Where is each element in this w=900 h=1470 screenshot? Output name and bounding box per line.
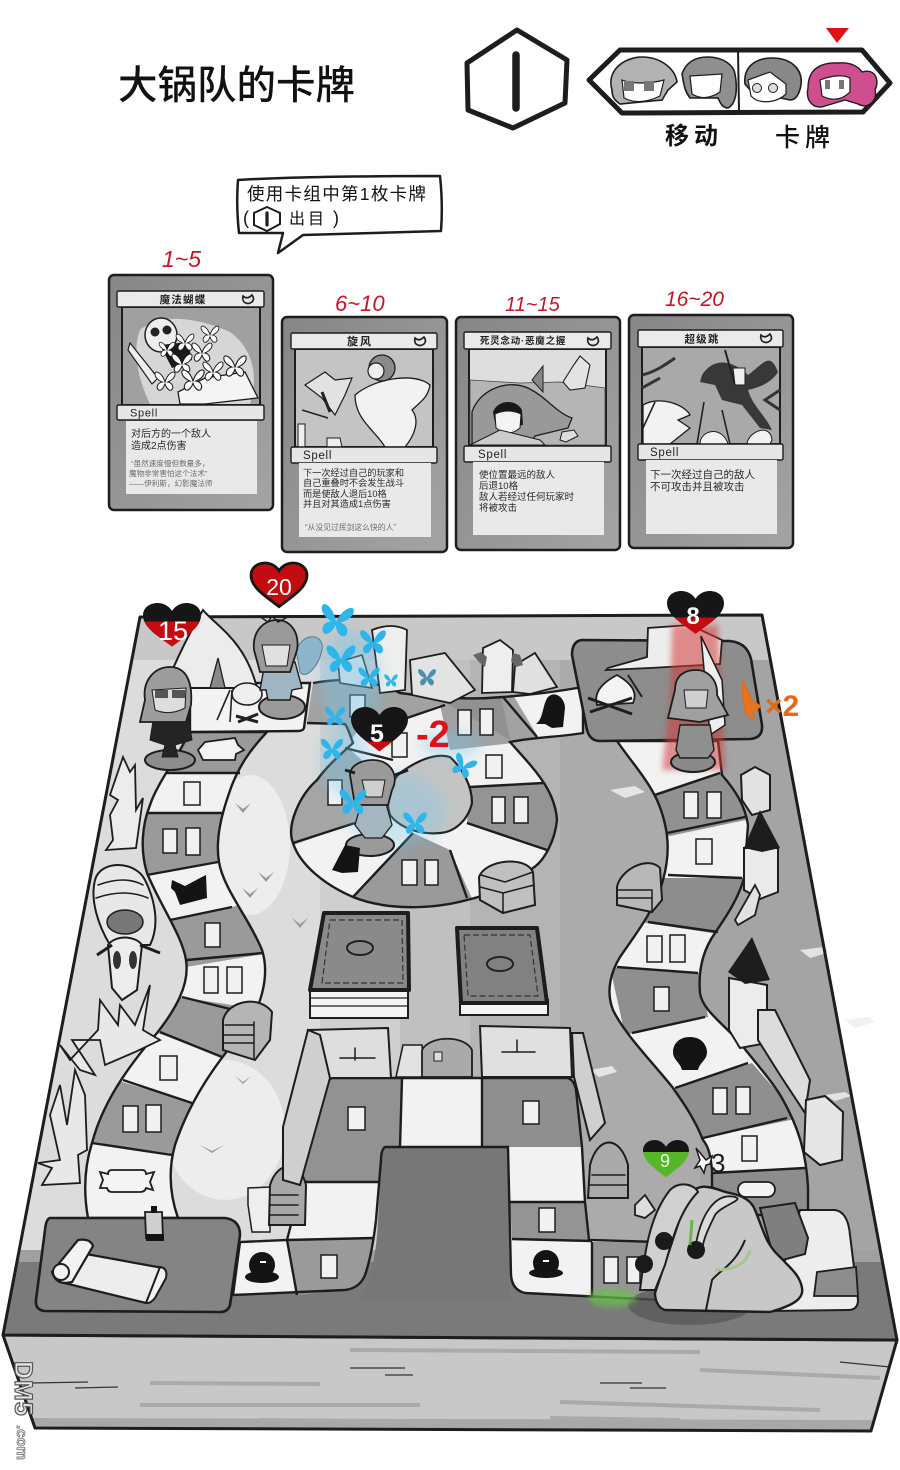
figure: crowned girl [254,616,322,719]
ruin: column [372,626,407,693]
icon: chest centre [479,861,535,913]
title: 大锅队的卡牌 [118,64,355,108]
ruin: rock [338,655,372,688]
range label 16~20: 16~20 [665,288,724,311]
card text box: 使位置最远的敌人 [479,469,556,481]
card type bar [291,447,437,463]
icon: cooking pot [217,683,262,722]
card title bar [117,291,264,307]
range label 6~10: 6~10 [335,291,385,316]
card text box: 造成2点伤害 [131,439,187,452]
heart 20 [251,563,307,607]
card art: hooded figure [469,349,606,446]
face four pink [807,63,877,107]
heart 15: 15 [158,616,188,646]
track: bottom U path [233,1078,660,1300]
attack buff x2 [742,680,799,723]
face two [682,57,736,108]
heart 8 [667,591,724,634]
card text box: “从没见过挥剑这么快的人” [305,522,396,532]
box side face [3,1335,897,1431]
card title bar [291,333,437,349]
attack value 3 [695,1148,725,1178]
road: dark centre lane [355,1147,510,1300]
icon: slime right [529,1250,563,1278]
scenery: lower tree [38,1070,87,1185]
card text box: 魔物非常害怕这个法术” [129,468,208,478]
icon: black boots [332,845,360,873]
figure: tentacle monster [588,1184,808,1325]
card text box: “虽然速度慢但数量多， [131,458,209,468]
label: move: 移动 [665,123,723,150]
scenery: dead tree [106,757,143,850]
range label 11~15: 11~15 [505,294,561,316]
scenery: tower one [735,810,780,925]
card text box: 后退10格 [479,480,519,492]
monster body [655,1187,802,1312]
attack value 3: 3 [711,1148,725,1178]
ruin: rubble [410,653,475,703]
card art: tornado [295,349,433,447]
icon: skull [673,1037,707,1070]
icon: tent [168,610,257,688]
track: right winding path [608,740,810,1216]
watermark [9,1361,37,1460]
heart 15 [143,603,201,647]
bubble text line two: ) [333,208,339,228]
icon: chest right [617,863,662,912]
heart 9 green: 9 [660,1151,670,1171]
card title bar [464,332,611,349]
card text box [126,421,257,494]
track: centre spiral [290,679,584,908]
scenery: right stump [741,767,770,815]
figure: red aura girl [662,625,728,772]
heart 5 [351,707,408,751]
card title bar [638,330,783,347]
panel: upper-left camp [168,610,310,732]
card title bar: 旋风 [347,334,373,348]
card title bar: 死灵念动·恶魔之握 [480,335,566,347]
panel: card whirlwind [282,317,447,552]
heart 20: 20 [266,574,292,600]
card text box: 并且对其造成1点伤害 [303,498,391,509]
card text box: ——伊利斯，幻影魔法师 [129,478,213,488]
monster crate [760,1203,808,1262]
icon: candy [100,1170,154,1192]
icon: wolf head [171,875,207,905]
watermark: .com [13,1425,30,1460]
range label 1~5: 1~5 [162,246,201,272]
blue butterfly glow [320,630,480,848]
panel: upper-right camp [572,625,762,741]
card type bar [464,446,611,462]
turn bar divider [738,50,739,111]
face one [611,57,677,104]
card text box [299,463,431,537]
icon: scroll [52,1240,166,1303]
icon: slime left [245,1252,279,1283]
card type bar: Spell [130,408,158,420]
icon: bread [738,1182,775,1197]
bubble text line two: ( [243,208,249,228]
figure: centre enemy girl [332,760,408,873]
card text box: 下一次经过自己的玩家和 [303,467,404,478]
icon: chest lower-left [248,1166,306,1232]
icon: lantern [145,1206,164,1241]
butterflies [318,604,478,834]
track: left winding path [84,732,268,1217]
panel: scroll mat [36,1206,240,1312]
scenery: tower two [728,937,770,1048]
icon: chopping stump [814,1267,858,1296]
icon: chest left [223,1002,272,1060]
card art: skull and butterflies [122,307,260,405]
figure: glasses girl [140,667,195,770]
speech bubble [237,176,442,253]
walls: right wall [480,1026,605,1140]
card text box: 而是使敌人退后10格 [303,488,387,499]
scenery: white clearing [770,1210,858,1311]
icon: broken wall [606,625,722,670]
scenery: rubble wall [758,1010,810,1113]
heart 5: 5 [370,720,384,748]
card text box: 不可攻击并且被攻击 [650,480,744,493]
icon: meat candy on path [198,738,244,760]
scenery: skeleton [93,865,160,1000]
panel: card magic butterflies [109,275,273,510]
card type bar [638,444,783,460]
icon: chest lower-right [588,1142,628,1198]
face three [745,58,801,102]
card text box: 对后方的一个敌人 [131,427,211,440]
icon: small chest and rock [396,1039,472,1077]
card type bar: Spell [303,450,332,462]
round number hexagon [467,30,567,128]
card text box: 敌人若经过任何玩家时 [479,491,575,503]
current turn marker [826,28,849,43]
attack buff x2: ×2 [765,690,799,723]
card type bar: Spell [650,447,679,459]
card title bar: 魔法蝴蝶 [160,293,206,306]
heart 8: 8 [686,603,700,630]
card art: rider and knights [642,347,780,444]
icon: ghost [536,694,565,728]
card text box: 下一次经过自己的敌人 [650,468,755,481]
board top surface [0,610,900,1352]
ruin: second column [482,640,513,693]
card type bar [117,405,264,420]
track card markers [123,695,757,1283]
panel: card necrokinesis [456,317,620,550]
scenery: broken column [804,1096,843,1165]
walls: left wall [283,1028,391,1185]
label: card: 卡牌 [775,124,835,152]
watermark: DM5 [9,1361,37,1417]
spiral centre space [388,756,472,833]
bubble text line one: 使用卡组中第1枚卡牌 [247,184,427,204]
turn bar frame [589,50,890,113]
card text box [646,460,777,534]
ruins at board top [338,626,557,703]
card text box: 将被攻击 [479,502,517,514]
card type bar: Spell [478,449,507,461]
bubble text line two [243,207,339,231]
bubble text line two: 出目 [289,210,327,228]
ruin: rock pile [513,653,557,694]
panel: card super jump [629,315,793,548]
turn order bar [589,50,890,113]
card text box [473,462,604,535]
scenery: bare branches [60,985,160,1075]
card title bar: 超级跳 [684,332,720,346]
icon: campfire [588,675,642,714]
decks: left deck [310,913,409,1018]
decks: right deck [457,928,548,1015]
damage -2: -2 [416,714,450,756]
card text box: 自己重叠时不会发生战斗 [303,477,404,488]
heart 9 green [643,1140,689,1177]
